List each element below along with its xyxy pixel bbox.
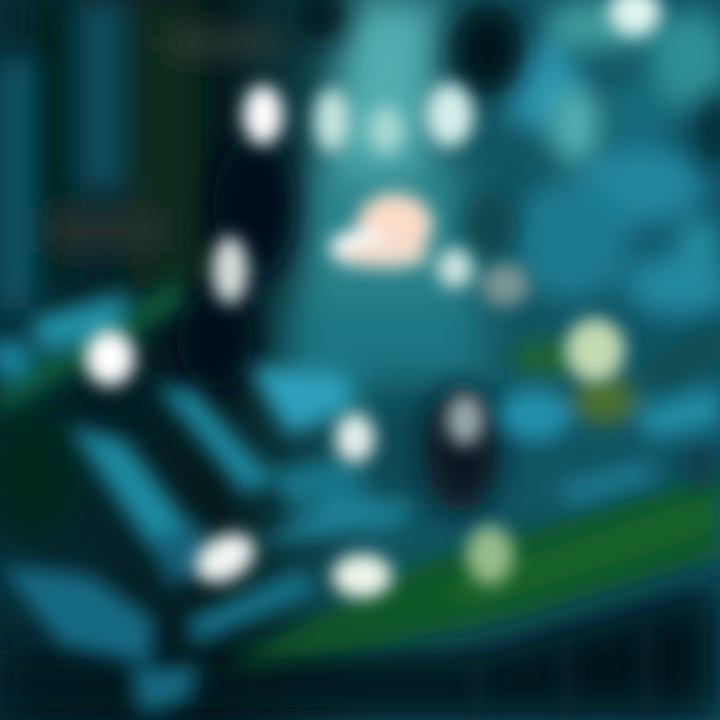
dark stems bottom right <box>470 620 654 720</box>
right teal foliage <box>500 0 720 317</box>
dark blotches <box>0 0 526 540</box>
right lower leaves <box>499 320 720 505</box>
blue leaves cluster <box>0 365 415 715</box>
left green frond <box>0 278 185 415</box>
central glowing bloom <box>330 193 433 268</box>
left dark canopy columns <box>0 0 280 310</box>
dark lower band <box>0 580 720 720</box>
central light column <box>285 0 485 510</box>
bottom green leaf <box>225 475 720 665</box>
white bokeh highlights <box>85 0 661 598</box>
